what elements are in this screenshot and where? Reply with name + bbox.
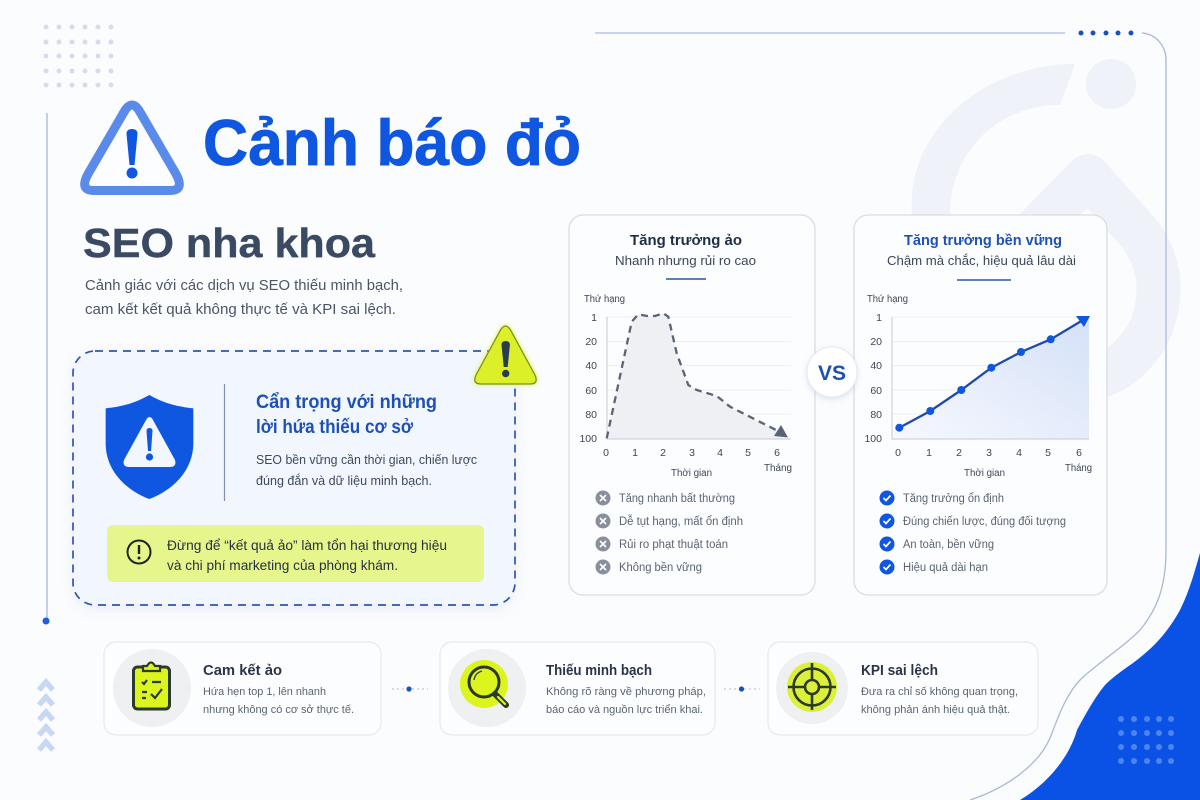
VS badge: VS <box>818 362 846 385</box>
card: false promises <box>104 642 381 735</box>
line chart: sustainable growth: 0 <box>895 447 901 459</box>
card: lack of transparency: Không rõ ràng về phương pháp, <box>546 686 706 698</box>
callout heading <box>256 392 437 438</box>
line chart: sustainable growth: 1 <box>876 312 882 324</box>
line chart: sustainable growth: 5 <box>1045 447 1051 459</box>
icon: target <box>787 662 837 712</box>
intro text: Cảnh giác với các dịch vụ SEO thiếu minh bạch, <box>85 278 403 294</box>
line chart: virtual growth: 60 <box>585 385 597 397</box>
chart title: Tăng trưởng bền vững <box>904 232 1062 249</box>
line chart: sustainable growth: Thời gian <box>964 468 1005 479</box>
icon: clipboard <box>134 662 170 709</box>
left vertical rule <box>42 113 50 624</box>
icon: yellow warning <box>475 326 536 384</box>
icon: shield <box>106 395 193 499</box>
line chart: virtual growth: 2 <box>660 447 666 459</box>
icon: magnifier <box>460 660 508 708</box>
callout body: SEO bền vững cần thời gian, chiến lược <box>256 453 477 467</box>
card: false promises: Hứa hẹn top 1, lên nhanh <box>203 686 326 698</box>
chart subtitle: Chậm mà chắc, hiệu quả lâu dài <box>887 253 1076 268</box>
benefits list: An toàn, bền vững <box>903 539 994 551</box>
benefits list: Đúng chiến lược, đúng đối tượng <box>903 516 1066 528</box>
card: lack of transparency <box>440 642 715 735</box>
subtitle: SEO nha khoa <box>83 220 376 266</box>
chart title: Tăng trưởng ảo <box>630 232 742 249</box>
intro text: cam kết kết quả không thực tế và KPI sai lệch. <box>85 302 396 318</box>
icon: title warning triangle <box>85 105 179 190</box>
risk list: Rủi ro phạt thuật toán <box>619 539 728 551</box>
card: wrong KPI: không phản ánh hiệu quả thật. <box>861 704 1010 716</box>
line chart: sustainable growth: 100 <box>864 433 882 445</box>
line chart: sustainable growth: 6 <box>1076 447 1082 459</box>
note box <box>107 525 484 582</box>
line chart: virtual growth: 1 <box>632 447 638 459</box>
line chart: virtual growth: 5 <box>745 447 751 459</box>
line chart: virtual growth: 3 <box>689 447 695 459</box>
chevrons <box>39 682 53 750</box>
line chart: virtual growth <box>579 294 792 479</box>
dot grid top left <box>44 24 114 88</box>
line chart: sustainable growth: 4 <box>1016 447 1022 459</box>
risk list <box>596 490 743 574</box>
note box: Đừng để “kết quả ảo” làm tổn hại thương hiệu <box>167 538 447 553</box>
line chart: virtual growth: 1 <box>591 312 597 324</box>
line chart: sustainable growth <box>864 294 1092 479</box>
connector <box>724 686 760 692</box>
benefits list: Tăng trưởng ổn định <box>903 493 1004 505</box>
line chart: sustainable growth: 2 <box>956 447 962 459</box>
benefits list: Hiệu quả dài hạn <box>903 562 988 574</box>
line chart: sustainable growth: 3 <box>986 447 992 459</box>
callout body <box>256 453 477 488</box>
card: lack of transparency: báo cáo và nguồn lực triển khai. <box>546 704 703 716</box>
line chart: virtual growth: 0 <box>603 447 609 459</box>
line chart: virtual growth: 80 <box>585 409 597 421</box>
card: wrong KPI <box>768 642 1038 735</box>
line chart: sustainable growth: 1 <box>926 447 932 459</box>
line chart: virtual growth: 20 <box>585 336 597 348</box>
card: false promises: Cam kết ảo <box>203 663 282 679</box>
risk list: Không bền vững <box>619 562 702 574</box>
panel: caution callout <box>73 326 536 605</box>
line chart: virtual growth: Thứ hạng <box>584 294 625 305</box>
line chart: virtual growth: 40 <box>585 360 597 372</box>
panel: virtual growth chart <box>569 215 815 595</box>
line chart: virtual growth: 4 <box>717 447 723 459</box>
callout body: đúng đắn và dữ liệu minh bạch. <box>256 473 432 488</box>
note box: và chi phí marketing của phòng khám. <box>167 558 398 573</box>
watermark logo <box>912 59 1159 378</box>
VS badge <box>807 347 857 397</box>
connector <box>392 686 428 692</box>
line chart: sustainable growth: Thứ hạng <box>867 294 908 305</box>
chart subtitle: Nhanh nhưng rủi ro cao <box>615 253 756 268</box>
title: Cảnh báo đỏ <box>203 106 581 179</box>
frame line with dots <box>595 30 1166 800</box>
line chart: virtual growth: 6 <box>774 447 780 459</box>
line chart: sustainable growth: 40 <box>870 360 882 372</box>
card: wrong KPI: Đưa ra chỉ số không quan trọng, <box>861 686 1018 698</box>
line chart: virtual growth: Tháng <box>764 463 792 474</box>
panel: sustainable growth chart <box>854 215 1107 595</box>
line chart: virtual growth: Thời gian <box>671 468 712 479</box>
blue corner wave <box>1020 553 1200 800</box>
card: false promises: nhưng không có cơ sở thực tế. <box>203 704 354 716</box>
line chart: sustainable growth: 80 <box>870 409 882 421</box>
line chart: virtual growth: 100 <box>579 433 597 445</box>
benefits list <box>880 490 1066 574</box>
callout heading: lời hứa thiếu cơ sở <box>256 417 413 438</box>
line chart: sustainable growth: Tháng <box>1065 463 1092 474</box>
card: wrong KPI: KPI sai lệch <box>861 663 938 679</box>
callout heading: Cẩn trọng với những <box>256 392 437 413</box>
line chart: sustainable growth: 60 <box>870 385 882 397</box>
risk list: Dễ tụt hạng, mất ổn định <box>619 515 743 528</box>
risk list: Tăng nhanh bất thường <box>619 493 735 505</box>
line chart: sustainable growth: 20 <box>870 336 882 348</box>
card: lack of transparency: Thiếu minh bạch <box>546 663 652 679</box>
intro text <box>85 278 403 318</box>
dots on blue wave <box>1118 716 1174 764</box>
